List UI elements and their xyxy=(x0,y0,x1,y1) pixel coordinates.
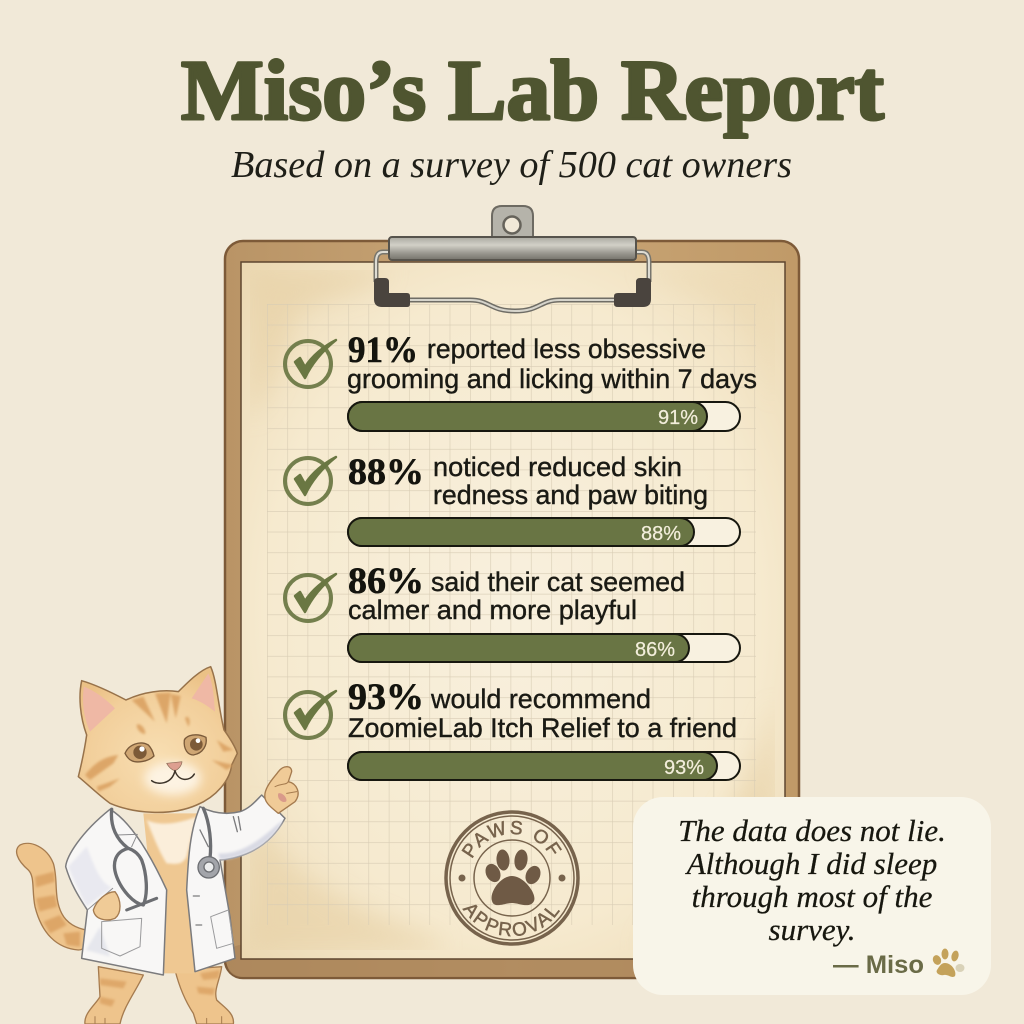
head xyxy=(78,667,237,812)
coat left xyxy=(66,809,167,975)
callout: Miso's quote: Although I did sleep xyxy=(685,846,937,881)
illustration: cat doctor xyxy=(17,667,298,1024)
eyes xyxy=(125,743,154,762)
text xyxy=(348,677,737,743)
panel: stat 1 xyxy=(285,330,757,431)
panel: clipboard xyxy=(225,206,799,978)
muzzle xyxy=(144,762,201,795)
callout: Miso's quote xyxy=(633,797,991,995)
stamp: paws of approval: PAWS OF xyxy=(462,820,562,858)
clip clamps xyxy=(374,278,410,307)
progress bar xyxy=(348,752,740,780)
pointing paw xyxy=(265,767,298,813)
left lapel xyxy=(117,834,137,847)
clip bar xyxy=(389,237,636,260)
progress bar xyxy=(348,402,740,431)
text: said their cat seemed xyxy=(431,567,685,597)
callout: Miso's quote: survey. xyxy=(769,912,855,947)
belly xyxy=(143,813,200,973)
icon: check xyxy=(285,691,336,738)
stamp: paws of approval: APPROVAL xyxy=(462,904,560,936)
stripes xyxy=(85,693,233,792)
text: calmer and more playful xyxy=(348,595,637,625)
panel: stat 2 xyxy=(285,452,740,546)
text: redness and paw biting xyxy=(433,480,708,510)
nose and mouth xyxy=(167,762,182,771)
callout: Miso's quote: through most of the xyxy=(692,879,933,914)
text: 93% xyxy=(348,677,424,718)
subtitle: Based on a survey of 500 cat owners xyxy=(231,144,792,186)
icon: check xyxy=(285,340,336,387)
paper stains xyxy=(250,270,775,950)
coat right and sleeve xyxy=(187,795,285,972)
callout: Miso's quote: The data does not lie. xyxy=(678,813,946,848)
text xyxy=(348,561,685,625)
clip tab xyxy=(492,206,533,240)
progress bar: 86% xyxy=(635,639,675,661)
paper sheet xyxy=(241,262,785,959)
text: would recommend xyxy=(430,684,651,714)
text: noticed reduced skin xyxy=(433,452,682,482)
ears inner xyxy=(83,673,215,732)
icon: small paw xyxy=(931,948,964,977)
panel: stat 4 xyxy=(285,677,740,780)
progress bar: 93% xyxy=(664,757,704,779)
title: Miso’s Lab Report xyxy=(181,42,884,138)
text: ZoomieLab Itch Relief to a friend xyxy=(348,713,737,743)
clip wire xyxy=(376,252,649,282)
text: 86% xyxy=(348,561,424,602)
left pocket xyxy=(102,918,142,956)
icon: check xyxy=(285,574,336,621)
stethoscope xyxy=(111,808,219,910)
text xyxy=(347,330,757,394)
graph grid xyxy=(267,304,756,925)
legs xyxy=(85,967,233,1024)
text: 88% xyxy=(348,452,424,493)
text xyxy=(348,452,708,510)
icon: check xyxy=(285,457,336,504)
panel: stat 3 xyxy=(285,561,740,662)
callout: Miso's quote: — Miso xyxy=(833,951,924,979)
text: grooming and licking within 7 days xyxy=(347,364,757,394)
progress bar xyxy=(348,518,740,546)
text: reported less obsessive xyxy=(427,334,706,364)
paw on hip xyxy=(93,892,120,920)
stamp: paws of approval xyxy=(444,810,580,946)
tail xyxy=(17,843,87,950)
clipboard board xyxy=(225,241,799,978)
progress bar xyxy=(348,634,740,662)
progress bar: 88% xyxy=(641,523,681,545)
text: 91% xyxy=(348,330,418,371)
progress bar: 91% xyxy=(658,407,698,429)
